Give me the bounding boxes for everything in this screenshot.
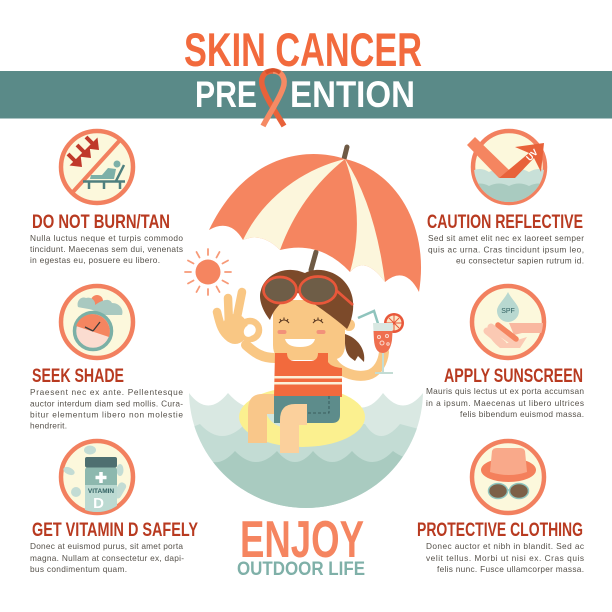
body text: velit tellus. Morbi ut nisi ex. Cras quis xyxy=(426,553,584,563)
body text: Sed sit amet elit nec ex laoreet semper xyxy=(428,233,584,243)
label: D: D xyxy=(93,495,104,512)
panel: seek shade xyxy=(30,286,183,430)
subtitle: prevention: PRE xyxy=(195,74,257,115)
title: skin cancer: SKIN CANCER xyxy=(184,23,422,76)
heading: GET VITAMIN D SAFELY xyxy=(32,519,198,541)
shorts xyxy=(274,396,340,423)
body text xyxy=(426,541,584,574)
heading: SEEK SHADE xyxy=(32,365,124,387)
panel: apply sunscreen xyxy=(426,286,584,419)
right arm xyxy=(330,352,384,376)
body text: bus condimentum quam. xyxy=(30,564,127,574)
left arm and OK hand xyxy=(217,292,275,358)
body text: quis ac urna. Cras tincidunt ipsum leo, xyxy=(428,244,584,254)
body text xyxy=(426,386,584,419)
body text: eu consectetur sapien rutrum id. xyxy=(456,256,584,266)
body text: felis nunc. Fusce ullamcorper massa. xyxy=(437,564,584,574)
cocktail xyxy=(358,311,404,373)
girl xyxy=(217,270,384,453)
swim ring xyxy=(239,387,365,447)
body text: auctor interdum diam sed mollis. Cura- xyxy=(30,398,183,408)
panel: protective clothing xyxy=(417,441,584,574)
icon: awareness ribbon xyxy=(262,70,284,126)
heading: enjoy: ENJOY xyxy=(240,511,364,569)
ponytail xyxy=(345,334,364,362)
body text: felis bibendum euismod massa. xyxy=(460,409,584,419)
heading: DO NOT BURN/TAN xyxy=(32,211,170,233)
icon: SPF drop on hand xyxy=(472,286,545,358)
face xyxy=(273,300,345,360)
subtitle: prevention xyxy=(195,74,415,115)
sunglasses xyxy=(264,276,353,305)
body text: Mauris quis lectus ut ex porta accumsan xyxy=(426,386,584,396)
sea waves xyxy=(189,393,423,508)
legs xyxy=(248,394,274,443)
label: UV: UV xyxy=(524,147,540,163)
body text: Nulla luctus neque et turpis commodo xyxy=(30,233,183,243)
body text: magna. Nullam at consectetur ex, dapi- xyxy=(30,553,184,563)
eyes xyxy=(279,318,323,323)
label: vitamin: VITAMIN xyxy=(88,488,114,495)
icon: vitamin bottle xyxy=(61,441,133,517)
header band xyxy=(0,71,612,118)
heading: outdoor life: OUTDOOR LIFE xyxy=(237,559,365,580)
body text: tincidunt. Maecenas sem dui, venenats xyxy=(30,244,183,254)
panel: do not burn/tan xyxy=(30,131,183,265)
icon: hat and sunglasses xyxy=(472,441,544,513)
icon: no sun bed xyxy=(61,131,133,203)
icon: reflected UV arrow xyxy=(467,131,548,205)
cheeks xyxy=(280,330,324,334)
body text xyxy=(30,387,183,430)
body text xyxy=(428,233,584,266)
body text: Donec auctor et nibh in blandit. Sed ac xyxy=(426,541,584,551)
body text: bitur elementum libero non molestie xyxy=(30,410,183,420)
subtitle: prevention: ENTION xyxy=(290,74,415,115)
body text: Donec at euismod purus, sit amet porta xyxy=(30,541,183,551)
panel: get vitamin d safely xyxy=(30,441,198,574)
icon: sun xyxy=(185,249,231,295)
panel: caution reflective xyxy=(427,131,584,266)
central illustration xyxy=(184,144,423,508)
body text xyxy=(30,233,183,265)
label: SPF: SPF xyxy=(501,308,515,315)
body text: in egestas eu, posuere eu libero. xyxy=(30,255,160,265)
hair xyxy=(260,270,353,329)
umbrella xyxy=(209,147,421,292)
mouth xyxy=(285,339,315,347)
shirt xyxy=(274,353,342,397)
body text: hendrerit. xyxy=(30,420,67,430)
body text xyxy=(30,541,184,574)
body text: in a ipsum. Maecenas ut libero ultrices xyxy=(426,398,584,408)
body text: Praesent nec ex ante. Pellentesque xyxy=(30,387,183,397)
icon: clock with clouds xyxy=(61,286,133,358)
